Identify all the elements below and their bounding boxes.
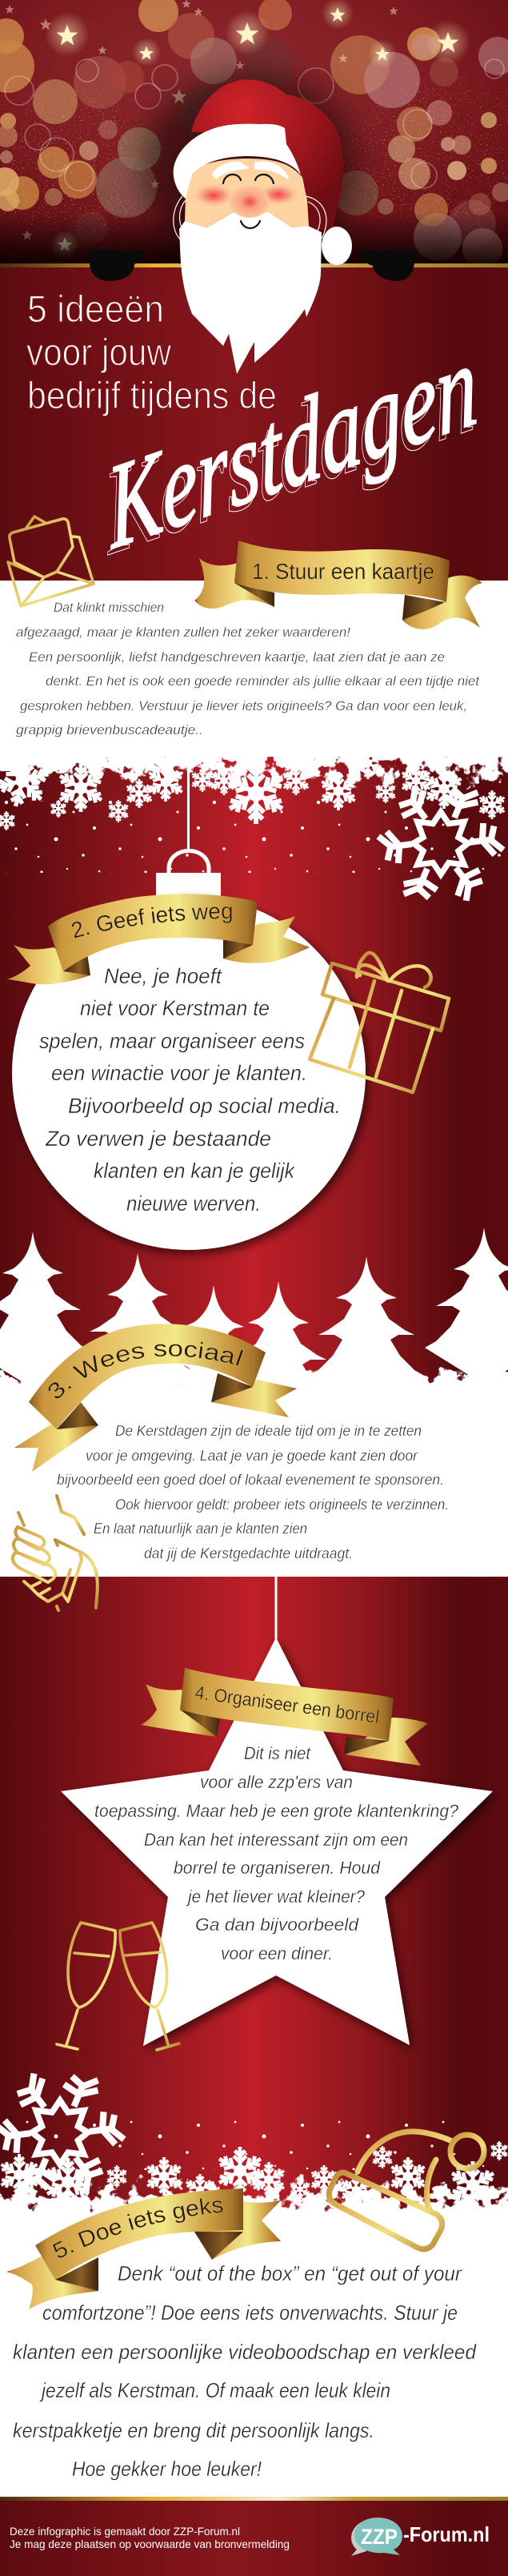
text block 4: borrel te organiseren. Houd: [174, 1858, 381, 1878]
text block 3: De Kerstdagen zijn de ideale tijd om je in te zetten: [115, 1423, 422, 1439]
text block 1: [16, 600, 480, 737]
footer panel: [0, 2497, 508, 2576]
text block 5: Hoe gekker hoe leuker!: [72, 2457, 262, 2481]
icon: gift: [310, 953, 449, 1092]
title: 5 ideeën voor jouw bedrijf tijdens de: 5 ideeën: [27, 287, 164, 330]
logo: ZZP-Forum.nl: ZZP: [361, 2525, 398, 2549]
text block 4: Dit is niet: [244, 1743, 311, 1763]
trees: [0, 1228, 508, 1442]
ribbon 1: [194, 541, 482, 629]
panel 4: red background: [0, 1577, 508, 2225]
text block 4: toepassing. Maar heb je een grote klantenkring?: [94, 1801, 459, 1821]
snow band bottom: [0, 2072, 508, 2224]
footer credit text: Je mag deze plaatsen op voorwaarde van bronvermelding: [10, 2538, 290, 2550]
eyebrows: [212, 161, 290, 180]
text block 5: kerstpakketje en breng dit persoonlijk langs.: [13, 2418, 374, 2442]
text block 3: voor je omgeving. Laat je van je goede kant zien door: [86, 1448, 418, 1464]
santa beard: [179, 212, 322, 374]
logo: ZZP-Forum.nl: [351, 2518, 490, 2556]
text block 2: Nee, je hoeft: [104, 964, 222, 988]
icon: envelope: [8, 516, 94, 606]
ornament bauble: [12, 896, 366, 1250]
text block 5: Denk “out of the box” en “get out of your: [118, 2261, 462, 2285]
text block 1: Een persoonlijk, liefst handgeschreven kaartje, laat zien dat je aan ze: [29, 649, 445, 665]
text block 2: klanten en kan je gelijk: [94, 1159, 295, 1183]
cheeks: [193, 183, 234, 207]
text block 5: jezelf als Kerstman. Of maak een leuk klein: [39, 2378, 390, 2402]
ribbon 4: [140, 1668, 428, 1766]
illustration: santa: [90, 72, 414, 374]
hair wisps: [174, 196, 326, 240]
text block 3: Ook hiervoor geldt: probeer iets origineels te verzinnen.: [115, 1497, 449, 1513]
text block 1: Dat klinkt misschien: [54, 600, 164, 615]
text block 1: denkt. En het is ook een goede reminder als jullie elkaar al een tijdje niet: [46, 673, 480, 689]
ribbon 3: 3. Wees sociaal: [48, 1342, 243, 1399]
title panel: red band: [0, 264, 508, 581]
text block 2: [39, 964, 341, 1216]
footer credit text: Deze infographic is gemaakt door ZZP-Forum.nl: [10, 2525, 240, 2538]
ribbon 4: 4. Organiseer een borrel: [194, 1682, 381, 1727]
mitten left: [90, 249, 144, 281]
nose: [230, 186, 270, 218]
text block 2: een winactie voor je klanten.: [51, 1061, 307, 1085]
santa hat: [191, 79, 343, 232]
text block 3: dat jij de Kerstgedachte uitdraagt.: [144, 1545, 353, 1561]
text block 2: niet voor Kerstman te: [80, 996, 270, 1020]
logo: ZZP-Forum.nl: -Forum.nl: [403, 2522, 490, 2546]
text block 5: [13, 2261, 477, 2481]
gold divider line: [0, 263, 508, 267]
panel 2: red background: [0, 757, 508, 1389]
panel 3: white: [0, 1389, 508, 1577]
ribbon 5: [6, 2188, 281, 2309]
santa face: [185, 159, 309, 227]
text block 4: voor alle zzp'ers van: [200, 1772, 353, 1792]
icon: santa hat: [329, 2132, 484, 2249]
text block 3: [57, 1423, 449, 1561]
snow band top: [0, 741, 508, 902]
text block 4: je het liever wat kleiner?: [186, 1887, 366, 1907]
text block 2: Zo verwen je bestaande: [45, 1127, 271, 1151]
mitten right: [360, 249, 414, 281]
panel 5: white: [0, 2223, 508, 2498]
hat pompom: [322, 227, 352, 265]
title: 5 ideeën voor jouw bedrijf tijdens de: voor jouw: [26, 331, 172, 373]
star shape: [61, 1577, 493, 2046]
text block 1: grappig brievenbuscadeautje..: [16, 722, 203, 737]
footer credit text: [10, 2525, 290, 2550]
ribbon 2: [6, 894, 310, 985]
header panel: bokeh background: [0, 0, 508, 268]
ribbon 5: 5. Doe iets geks: [53, 2198, 223, 2258]
text block 1: afgezaagd, maar je klanten zullen het zeker waarderen!: [16, 625, 350, 640]
text block 1: gesproken hebben. Verstuur je liever iets origineels? Ga dan voor een leuk,: [20, 698, 467, 713]
text block 3: En laat natuurlijk aan je klanten zien: [94, 1521, 307, 1537]
ribbon 1: 1. Stuur een kaartje: [252, 559, 434, 584]
icon: handshake: [13, 1496, 98, 1610]
eyes and smile: [223, 175, 274, 228]
text block 4: Dan kan het interessant zijn om een: [144, 1830, 408, 1850]
ribbon 2: 2. Geef iets weg: [72, 906, 232, 938]
text block 2: Bijvoorbeeld op social media.: [68, 1094, 341, 1118]
title: 5 ideeën voor jouw bedrijf tijdens de: bedrijf tijdens de: [27, 374, 277, 416]
fur hat brim: [174, 124, 305, 199]
text block 2: nieuwe werven.: [126, 1192, 261, 1216]
text block 4: Ga dan bijvoorbeeld: [195, 1915, 359, 1935]
text block 2: spelen, maar organiseer eens: [39, 1029, 305, 1053]
title: 5 ideeën voor jouw bedrijf tijdens de: [26, 287, 277, 416]
text block 4: voor een diner.: [221, 1943, 333, 1963]
icon: champagne glasses: [57, 1923, 179, 2050]
ribbon 3: [14, 1324, 297, 1472]
ornament string and ring: [156, 749, 221, 897]
text block 5: comfortzone”! Doe eens iets onverwachts. Stuur je: [42, 2301, 458, 2325]
text block 4: [94, 1743, 459, 1963]
text block 5: klanten een persoonlijke videoboodschap en verkleed: [13, 2340, 477, 2364]
text block 3: bijvoorbeeld een goed doel of lokaal evenement te sponsoren.: [57, 1472, 444, 1488]
